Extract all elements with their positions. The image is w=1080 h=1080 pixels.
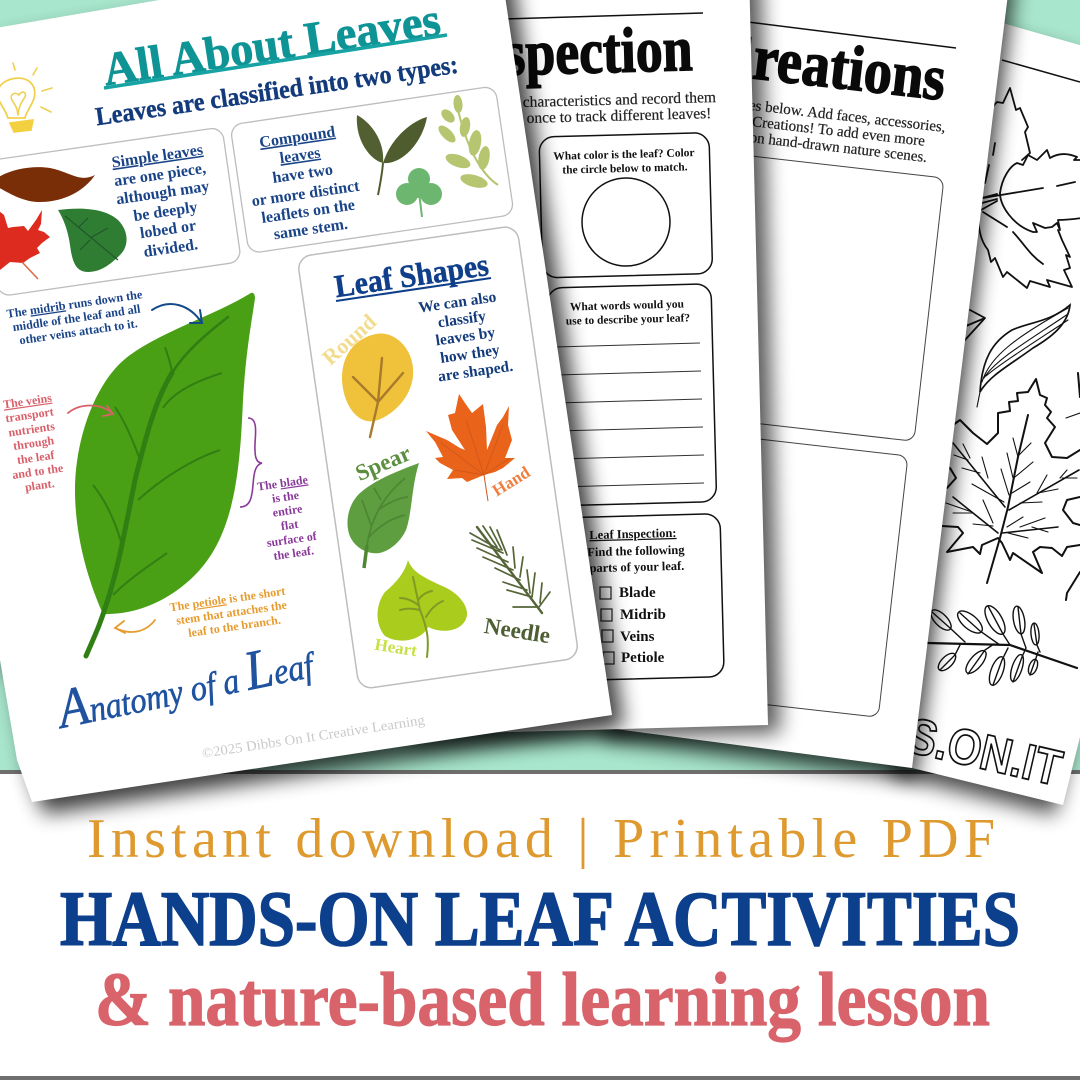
label: hand: Hand	[489, 462, 534, 500]
panel: find the parts checklist: Find the following	[587, 543, 685, 559]
icon: round yellow leaf	[342, 333, 413, 437]
panel: simple leaves	[0, 127, 241, 297]
lower white band	[0, 770, 1080, 1080]
leaf shapes intro text: leaves by	[435, 324, 496, 349]
simple leaves text: be deeply	[132, 199, 199, 225]
leaf shapes intro text: are shaped.	[437, 358, 514, 386]
main leaf anatomy illustration	[75, 293, 255, 656]
leaf shapes intro text	[417, 288, 514, 387]
panel: describe your leaf: What words would you	[570, 298, 685, 313]
arrow: veins	[68, 406, 113, 416]
arrow: midrib	[152, 304, 202, 323]
script title: anatomy of a leaf: Anatomy of a Leaf	[49, 628, 322, 741]
callout: blade: the leaf.	[273, 543, 315, 563]
page 4: colouring leaves	[799, 8, 1080, 815]
compound leaves text: Compound	[258, 124, 337, 151]
simple leaves text: although may	[115, 178, 210, 208]
icon: light green branch	[436, 95, 498, 190]
simple leaves text	[110, 141, 218, 264]
leaf shapes intro text: how they	[439, 342, 501, 367]
label: spear: Spear	[352, 440, 414, 486]
icon: red maple leaf	[0, 207, 50, 279]
instructions text	[613, 83, 946, 168]
compound leaves text: have two	[271, 161, 334, 187]
compound leaves text: or more distinct	[251, 178, 361, 210]
callout: veins: The veins	[2, 391, 53, 412]
panel: find the parts checklist: Midrib	[620, 607, 666, 623]
icon: pine needle branch	[470, 526, 550, 613]
label: needle: Needle	[482, 613, 552, 648]
callout: veins: and to the	[11, 461, 65, 482]
heading: inspection: Leaf Inspection	[335, 13, 693, 93]
callout: blade: entire	[272, 501, 304, 520]
bottom subheadline: & nature-based learning lesson	[95, 958, 990, 1042]
page 2: leaf inspection worksheet	[335, 0, 780, 743]
bottom caption: instant download: Instant download | Printable PDF	[87, 808, 995, 870]
callout: blade	[240, 418, 321, 564]
compound leaves text: leaves	[279, 144, 321, 167]
simple leaves text: are one piece,	[113, 160, 207, 190]
panel: find the parts checklist	[554, 514, 724, 681]
heading: leaf shapes: Leaf Shapes	[332, 246, 491, 304]
label: round: Round	[317, 309, 381, 370]
callout: blade: flat	[280, 517, 299, 533]
callout: veins: the leaf	[16, 448, 56, 467]
callout: midrib: The midrib runs down the	[6, 287, 144, 321]
instructions text: Use this page more than once to track different leaves!	[373, 105, 712, 131]
icon: orange maple leaf	[426, 394, 515, 501]
drawing box 2	[719, 438, 908, 717]
callout: petiole	[115, 584, 290, 642]
icon: spear green leaf	[347, 463, 419, 568]
icon: olive twin leaves	[357, 115, 427, 195]
simple leaves text: Simple leaves	[111, 141, 204, 172]
callout: blade: is the	[271, 488, 300, 506]
callout: veins	[1, 390, 113, 496]
icon: narrow veined leaf outline	[977, 305, 1070, 407]
subheading: Leaves are classified into two types:	[94, 50, 460, 131]
instructions text: fun, glue them on hand-drawn nature scenes.	[659, 120, 928, 166]
label: heart: Heart	[373, 635, 419, 660]
panel: leaf colour: What color is the leaf? Color	[553, 147, 695, 163]
panel: leaf colour: the circle below to match.	[562, 161, 688, 177]
panel: describe your leaf: use to describe your leaf?	[566, 312, 690, 328]
callout: veins: transport	[4, 404, 55, 425]
instructions text	[372, 89, 717, 131]
panel: find the parts checklist: Leaf Inspection:	[589, 526, 677, 542]
callout: petiole: leaf to the branch.	[187, 613, 282, 640]
callout: petiole: stem that attaches the	[175, 598, 288, 628]
instructions text: Observe the leaf's characteristics and record them	[408, 89, 716, 114]
callout: blade: The blade	[256, 472, 309, 494]
panel: leaf colour	[539, 133, 713, 278]
callout: veins: plant.	[24, 476, 55, 494]
copyright: ©2025 Dibbs On It Creative Learning	[201, 713, 426, 762]
callout: veins: through	[12, 433, 55, 453]
panel: find the parts checklist: Petiole	[621, 650, 665, 666]
compound leaves text: leaflets on the	[260, 197, 356, 227]
callout: midrib: middle of the leaf and all	[12, 302, 142, 334]
panel: find the parts checklist: Veins	[620, 629, 655, 645]
heading: creations: Leaf Creations	[587, 4, 949, 115]
icon: light bulb	[0, 63, 52, 132]
drawing box 1	[710, 155, 944, 441]
leaf shapes intro text: classify	[437, 308, 487, 331]
simple leaves text: divided.	[142, 236, 199, 261]
callout: veins: nutrients	[7, 419, 56, 440]
icon: leafy branch outline	[927, 603, 1077, 687]
arrow: petiole	[115, 620, 155, 633]
bracket: blade	[240, 418, 262, 507]
compound leaves text	[242, 121, 366, 246]
icon: lobed leaf outline	[965, 88, 1080, 340]
instructions text: and more to your Leaf Creations! To add even more	[614, 99, 926, 150]
icon: lime heart leaf	[378, 560, 467, 657]
icon: maple leaf outline	[942, 373, 1080, 600]
callout: petiole: The petiole is the short	[169, 584, 286, 614]
panel: leaf shapes	[297, 225, 579, 690]
icon: clover	[396, 168, 442, 217]
leaf shapes intro text: We can also	[417, 288, 498, 317]
panel: compound leaves	[230, 86, 514, 254]
panel: describe your leaf	[547, 284, 717, 506]
callout: midrib	[6, 287, 202, 349]
panel: find the parts checklist: Blade	[619, 585, 656, 601]
panel: find the parts checklist: parts of your leaf.	[589, 559, 685, 575]
icon: green heart leaf	[58, 209, 127, 272]
icon: brown leaf	[0, 167, 95, 202]
mint background	[0, 0, 1080, 772]
compound leaves text: same stem.	[273, 216, 349, 243]
callout: midrib: other veins attach to it.	[18, 316, 138, 347]
page 3: leaf creations worksheet	[587, 0, 1015, 780]
instructions text: Decorate the leaves below. Add faces, accessories,	[644, 86, 946, 136]
callout: blade: surface of	[266, 529, 319, 550]
page 1: all about leaves poster	[0, 0, 624, 814]
simple leaves text: lobed or	[139, 217, 197, 242]
